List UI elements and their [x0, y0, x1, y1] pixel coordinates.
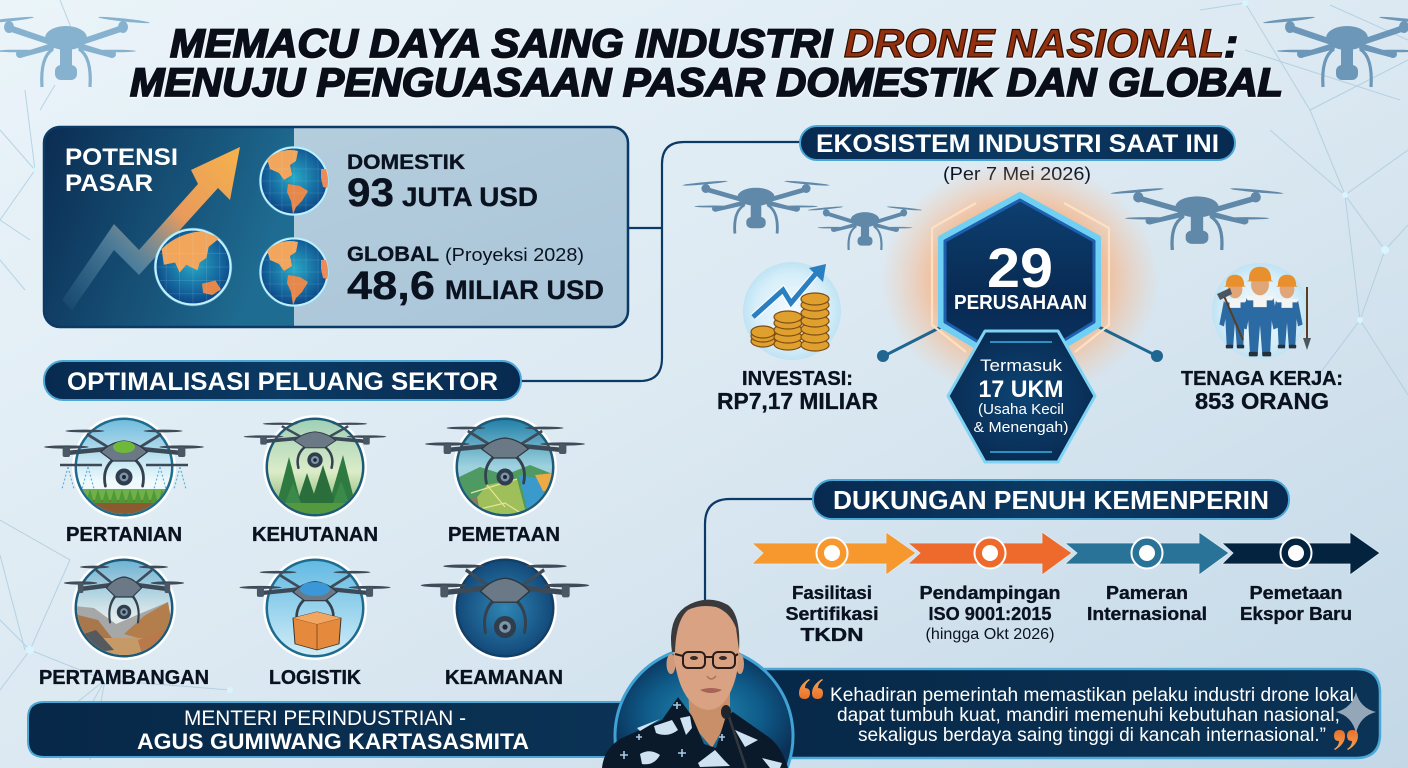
panel: potensi pasar — [44, 127, 628, 327]
text: domestik: JUTA USD — [402, 182, 538, 212]
icon: drone top left — [0, 16, 150, 87]
text: global — [347, 243, 604, 308]
neck — [688, 690, 730, 748]
heading: optimalisasi peluang sektor: OPTIMALISASI PELUANG SEKTOR — [67, 368, 498, 396]
text: investasi: INVESTASI: — [742, 368, 853, 390]
head — [666, 600, 744, 710]
hexagon: 29 perusahaan: 29 — [987, 236, 1053, 299]
sector: kehutanan — [244, 415, 386, 546]
title — [130, 22, 1283, 105]
heading: dukungan penuh kemenperin: DUKUNGAN PENUH KEMENPERIN — [833, 485, 1269, 515]
hexagon: 17 UKM: & Menengah) — [974, 419, 1069, 436]
step: pemetaan ekspor — [1240, 583, 1352, 624]
step: fasilitasi — [786, 583, 878, 645]
icon: pemetaan drone — [425, 415, 585, 519]
connector lines with dots — [877, 327, 1163, 362]
icon: drone silhouette 2 — [808, 206, 922, 250]
heading: optimalisasi peluang sektor — [44, 361, 521, 400]
label: pemetaan: PEMETAAN — [448, 524, 560, 546]
icon: drone silhouette 3 — [1110, 187, 1284, 250]
hexagon: 17 UKM — [948, 331, 1095, 462]
arrow 2 — [908, 532, 1072, 575]
sector: pemetaan — [425, 415, 585, 546]
icon: drone silhouette 1 — [682, 180, 830, 234]
icon: pertambangan drone — [64, 556, 184, 660]
microphone — [721, 705, 746, 768]
quote text: dapat tumbuh kuat, mandiri memenuhi kebutuhan nasional, — [837, 704, 1340, 726]
label: kehutanan: KEHUTANAN — [252, 524, 378, 546]
step: fasilitasi: Sertifikasi — [786, 604, 878, 624]
node 1 — [816, 538, 848, 568]
name bar: MENTERI PERINDUSTRIAN - — [184, 707, 466, 730]
text: investasi — [717, 368, 878, 414]
title: MEMACU DAYA SAING INDUSTRI DRONE NASIONAL : — [170, 22, 1238, 66]
text: global: MILIAR USD — [445, 275, 604, 305]
step: pendampingan: Pendampingan — [920, 583, 1060, 603]
icon: opening quote mark — [799, 679, 823, 699]
quote text: Kehadiran pemerintah memastikan pelaku industri drone lokal — [830, 684, 1354, 706]
label: pertambangan: PERTAMBANGAN — [39, 667, 209, 689]
icon: keamanan drone — [421, 556, 589, 660]
hexagon: 17 UKM: (Usaha Kecil — [978, 401, 1064, 418]
step: pendampingan — [920, 583, 1060, 643]
icon: globe domestik — [259, 146, 330, 216]
connector: market to ecosystem — [521, 142, 800, 381]
icon: globe global — [259, 237, 330, 307]
hexagon: 17 UKM: 17 UKM — [978, 376, 1064, 403]
arrow 3 — [1065, 532, 1229, 575]
label: keamanan: KEAMANAN — [445, 667, 563, 689]
heading: potensi pasar: POTENSI — [65, 144, 178, 171]
connector: support line — [705, 499, 813, 610]
step: pameran — [1087, 583, 1207, 624]
step: pendampingan: ISO 9001:2015 — [928, 604, 1052, 624]
hexagon: 17 UKM: Termasuk — [980, 356, 1063, 375]
step: pendampingan: (hingga Okt 2026) — [926, 626, 1054, 643]
glasses — [675, 652, 738, 668]
icon: pertanian drone — [44, 415, 204, 519]
text: global: (Proyeksi 2028) — [445, 245, 584, 265]
text: tenaga kerja — [1181, 368, 1343, 414]
name bar: AGUS GUMIWANG KARTASASMITA — [137, 729, 529, 754]
text: tenaga kerja: TENAGA KERJA: — [1181, 368, 1343, 390]
name bar — [28, 702, 650, 757]
step: fasilitasi: TKDN — [800, 625, 864, 645]
step: fasilitasi: Fasilitasi — [792, 583, 872, 603]
date note: (Per 7 Mei 2026) — [943, 164, 1091, 184]
sector: logistik — [239, 556, 391, 689]
step: pameran: Internasional — [1087, 604, 1207, 624]
quote text — [830, 684, 1354, 746]
text: global: 48,6 — [347, 264, 435, 308]
icon: globe asia — [154, 228, 232, 306]
heading: potensi pasar: PASAR — [65, 170, 153, 197]
timeline arrows — [752, 532, 1380, 575]
portrait: minister — [602, 600, 793, 768]
sector: pertambangan — [39, 556, 209, 689]
icon: parcel box — [293, 612, 341, 650]
text: domestik — [347, 151, 538, 215]
step: pemetaan ekspor: Ekspor Baru — [1240, 604, 1352, 624]
title: MENUJU PENGUASAAN PASAR DOMESTIK DAN GLOBAL — [130, 61, 1283, 105]
icon: drone top right — [1263, 16, 1408, 87]
arrow 1 — [752, 532, 916, 575]
icon: workers — [1212, 263, 1311, 359]
icon: growth arrow — [62, 147, 240, 310]
heading: potensi pasar — [65, 144, 178, 197]
hexagon: 29 perusahaan — [932, 195, 1109, 372]
glow behind hexagon — [880, 160, 1160, 400]
label: logistik: LOGISTIK — [269, 667, 362, 689]
icon: kehutanan drone — [244, 415, 386, 519]
step: pameran: Pameran — [1106, 583, 1188, 603]
label: pertanian: PERTANIAN — [66, 524, 182, 546]
icon: investasi coins and arrow — [743, 262, 841, 360]
hexagon: 29 perusahaan: PERUSAHAAN — [954, 292, 1087, 314]
text: tenaga kerja: 853 ORANG — [1195, 388, 1329, 414]
text: domestik: DOMESTIK — [347, 151, 465, 174]
quote bar — [740, 669, 1380, 758]
heading: ekosistem industri: EKOSISTEM INDUSTRI SAAT INI — [816, 130, 1219, 158]
shirt — [602, 697, 788, 768]
icon: closing quote mark — [1334, 730, 1358, 750]
quote text: sekaligus berdaya saing tinggi di kancah internasional.” — [858, 724, 1326, 746]
sparkle — [1336, 692, 1376, 733]
arrow 4 — [1222, 532, 1380, 575]
text: global: GLOBAL — [347, 243, 439, 266]
text: investasi: RP7,17 MILIAR — [717, 388, 878, 414]
text: domestik: 93 — [347, 171, 394, 215]
icon: logistik drone — [239, 556, 391, 660]
heading: dukungan penuh kemenperin — [813, 480, 1289, 519]
node 3 — [1132, 538, 1162, 568]
node 2 — [974, 538, 1006, 568]
node 4 — [1280, 538, 1312, 568]
step: pemetaan ekspor: Pemetaan — [1250, 583, 1342, 603]
sector: pertanian — [44, 415, 204, 546]
sector: keamanan — [421, 556, 589, 689]
